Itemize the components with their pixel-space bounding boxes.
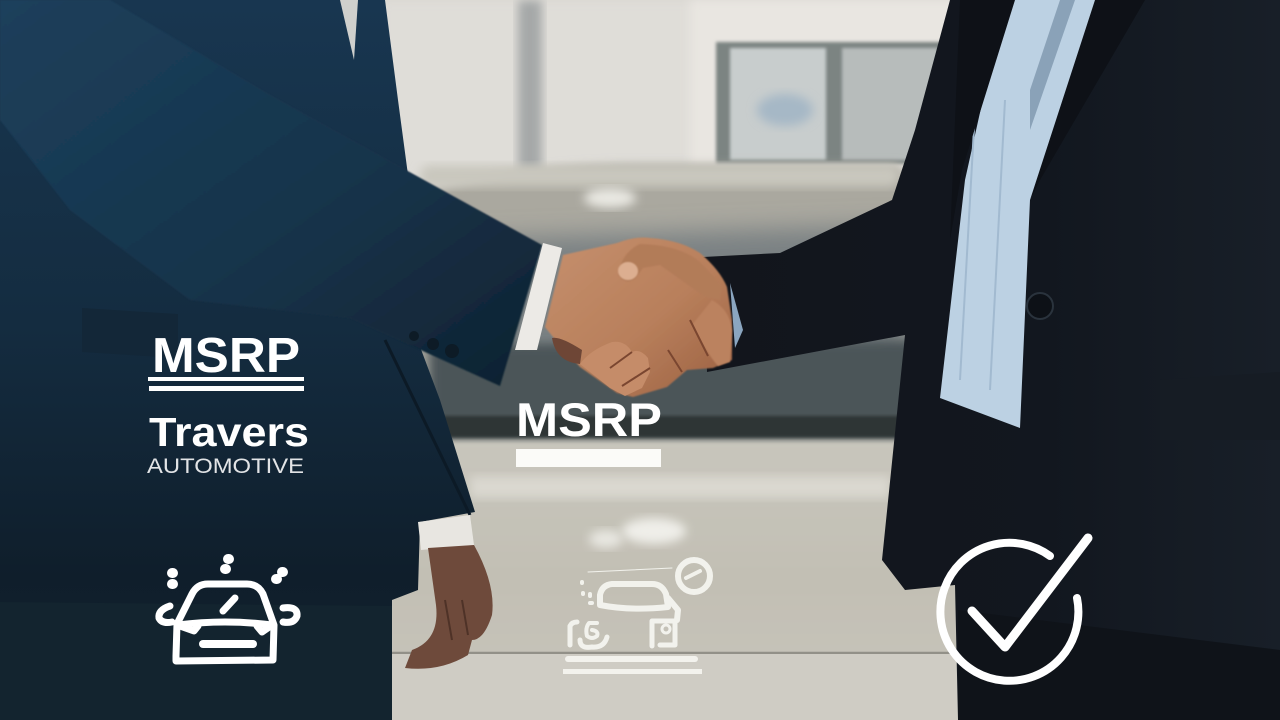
icon: check mark in circle <box>940 538 1088 681</box>
left person: shirt cuff and lowered hand <box>405 243 562 669</box>
caption lines <box>568 656 695 662</box>
right person: jacket, shirt and trousers <box>703 0 1280 720</box>
MSRP heading left: MSRP <box>152 329 300 383</box>
background: parked car <box>390 165 970 720</box>
MSRP heading center: MSRP <box>516 393 662 446</box>
solid bar <box>516 449 661 467</box>
left panel: MSRP logo block <box>147 329 309 478</box>
handshake hands <box>545 238 732 397</box>
icon: car front <box>159 559 297 661</box>
left person: jacket and trousers <box>0 0 542 720</box>
double underline <box>148 377 304 391</box>
icon: car outline with gauge <box>563 560 710 674</box>
center panel: MSRP label and bar <box>516 393 662 467</box>
AUTOMOTIVE wordmark: AUTOMOTIVE <box>147 455 304 478</box>
Travers wordmark: Travers <box>149 409 309 455</box>
